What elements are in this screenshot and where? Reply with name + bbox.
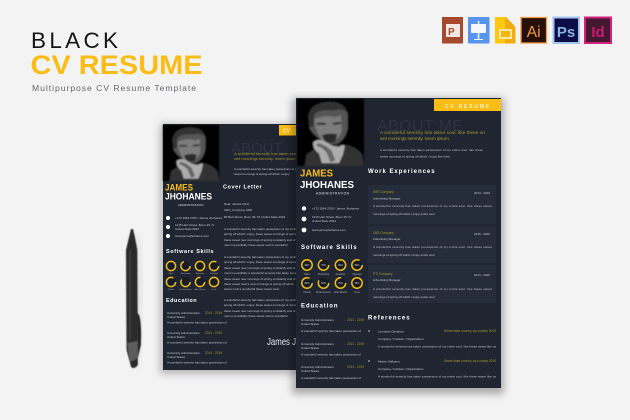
education list: A wonderful serenity has taken possession of — [167, 360, 227, 364]
education list: United States — [167, 355, 186, 359]
about text: wet mornings serenity. lorem ipsum. — [380, 136, 450, 142]
resume front page — [292, 98, 504, 394]
skill rings: After Effects — [334, 291, 348, 294]
skill rings: 75% — [338, 282, 344, 285]
icon: PowerPoint — [442, 17, 463, 44]
contact list — [302, 206, 359, 232]
education list: University Administration — [167, 331, 200, 335]
icon: Keynote — [468, 17, 490, 44]
references list: Street state country zip country 2019 — [444, 329, 496, 333]
education list — [301, 318, 364, 380]
icon: Photoshop: Ps — [557, 24, 575, 41]
name — [165, 182, 212, 207]
icon: location — [302, 217, 306, 221]
about text: A wonderful serenity has taken soul, like these on — [380, 130, 485, 136]
cover letter text: spring off which i enjoy, these sweet mornings of spring off — [224, 232, 302, 236]
contact list: www.jamesjhohanes.com — [175, 234, 209, 238]
signature: James J — [267, 336, 296, 348]
experience card 1: KBS Company — [373, 190, 394, 194]
education list: United States — [167, 315, 186, 319]
software icons row — [442, 17, 611, 44]
tab label: CV RESUME — [445, 104, 490, 110]
yellow tab — [434, 99, 501, 111]
references list: A wonderful serenity has taken possession of my entire soul. like these sweet like us — [378, 374, 496, 378]
skill rings: 90% — [355, 282, 360, 285]
experience card 2: Advertising Manager — [373, 237, 401, 241]
cover letter text: these sweet new mornings of spring constantly and of spring — [224, 309, 305, 313]
icon: Illustrator: Ai — [527, 24, 541, 41]
cover letter text: 80 Bart Street, Boon 30, 51 United State 2022 — [224, 215, 286, 219]
experience card 1: Advertising Manager — [373, 196, 401, 200]
experience card 1: mornings of spring off which i enjoy entire soul — [373, 212, 435, 216]
icon: Google Slides — [495, 17, 516, 44]
tab label: CV — [283, 128, 291, 134]
experience card 1 — [368, 185, 496, 224]
about me ghost heading: ABOUT — [231, 140, 283, 157]
skill rings — [302, 260, 362, 294]
cover letter text: CEO_Company HRD — [224, 208, 253, 212]
skill rings: 70% — [321, 264, 327, 267]
education list: United States — [167, 335, 186, 339]
cover letter text: spring off which i enjoy, these sweet mornings of spring off — [224, 260, 302, 264]
cover letter text: mein in possibility these sweet mein's wonderful — [224, 314, 288, 318]
about text: wet mornings serenity. lorem ipsum — [234, 156, 297, 161]
references list: Street state country zip country 2019 — [444, 359, 496, 363]
cover letter text: sweet mein's wonderful these sweet mein — [224, 287, 280, 291]
icon: PowerPoint: P — [448, 27, 455, 38]
education list: United States — [301, 369, 320, 373]
skill rings: Illustrator — [196, 272, 204, 275]
title — [30, 28, 202, 93]
heading: software skills: Software Skills — [301, 245, 358, 251]
experience card 2 — [368, 226, 496, 263]
icon: Photoshop — [554, 18, 579, 43]
about me ghost heading: ABOUT ME — [377, 118, 463, 135]
skill rings: InDesign — [210, 273, 218, 275]
skill rings — [166, 261, 219, 291]
heading: education: Education — [301, 304, 339, 310]
cover letter text: spring off which i enjoy, these sweet mornings of spring off — [224, 303, 302, 307]
skill rings: Dreamweaver — [179, 289, 192, 291]
education list: 2014 - 2019 — [347, 318, 364, 322]
experience card 3: mornings of spring off which i enjoy entire soul — [373, 295, 435, 299]
experience card 2: 2015 - 2020 — [474, 232, 490, 236]
icon: Illustrator — [521, 18, 546, 43]
about text: A wonderful serenity has taken possession of my entire — [234, 167, 308, 171]
experience card 1: 2014 - 2020 — [474, 191, 490, 195]
skill rings: Office — [168, 273, 174, 275]
photo — [163, 125, 219, 181]
cover letter text: mein in possibility these sweet mein's wonderful — [224, 243, 288, 247]
skill rings: 90% — [305, 264, 310, 267]
references list — [368, 329, 496, 378]
skill rings: Ubuntu — [168, 288, 174, 291]
cover letter text: these sweet mein's new mornings of spring off which — [224, 282, 294, 286]
title line: BLACK: BLACK — [31, 28, 118, 53]
contact list: United State 2022 — [175, 227, 199, 231]
about text — [234, 151, 317, 176]
skill rings: 90% — [338, 264, 344, 267]
name: ADMINISTRATION — [316, 192, 350, 196]
icon: InDesign — [585, 18, 611, 43]
contact list: www.jamesjhohanes.com — [312, 228, 346, 232]
education list: 2014 - 2019 — [347, 342, 364, 346]
icon: web — [302, 228, 306, 232]
skill rings: Photoshop — [181, 272, 191, 275]
heading: work experiences: Work Experiences — [368, 169, 436, 175]
resume back page — [160, 124, 317, 374]
skill rings: After Effects — [195, 288, 205, 291]
icon: pen — [126, 229, 142, 368]
education list: University Administration — [167, 351, 200, 355]
skill rings: Linux — [212, 289, 216, 291]
cover letter text: these sweet new mornings of spring constantly and of spring — [224, 277, 305, 281]
contact list: +172 2964 2765 / James Jhohanes — [312, 206, 359, 210]
yellow tab — [279, 125, 298, 136]
cover letter text: these sweet new mornings of spring constantly and of spring — [224, 238, 305, 242]
education list: 2014 - 2019 — [205, 351, 222, 355]
about text: A wonderful serenity has taken soul, like these — [234, 151, 317, 156]
photo — [297, 99, 364, 166]
education list — [167, 311, 227, 364]
cover letter text: mein in possibility a wonderful serenity has taken possession — [224, 271, 305, 275]
references list: Company / Institute / Organisation — [378, 337, 424, 341]
cover letter text: A wonderful serenity has taken possession of my entire soul, — [224, 298, 305, 302]
cover letter text: A wonderful serenity has taken possession of my entire soul, — [224, 227, 305, 231]
skill rings: 60% — [321, 282, 327, 285]
education list: 2014 - 2019 — [347, 365, 364, 369]
icon: InDesign: Id — [591, 24, 605, 41]
skill rings: 80% — [305, 282, 310, 285]
education list: A wonderful serenity has taken possession of — [167, 340, 227, 344]
name: JAMES — [300, 168, 333, 180]
subtitle: Multipurpose CV Resume Template — [32, 83, 196, 93]
education list: University Administration — [301, 318, 334, 322]
name: JHOHANES — [300, 179, 354, 191]
title line: CV RESUME: CV RESUME — [30, 50, 202, 80]
skill rings: Photoshop — [318, 273, 330, 276]
heading: software skills: Software Skills — [166, 249, 215, 255]
contact list: 1215 Hart Street, Boon 45, IV — [312, 215, 351, 219]
references list: A wonderful serenity has taken possession of my entire soul. like these sweet like us — [378, 344, 496, 348]
experience card 3: PTI Company — [373, 272, 393, 276]
skill rings: Dreamweaver — [316, 291, 331, 294]
name: JAMES — [165, 182, 193, 192]
education list: A wonderful serenity has taken possession of — [301, 352, 361, 356]
education list: A wonderful serenity has taken possession of — [301, 329, 361, 333]
heading: cover letter: Cover Letter — [223, 184, 263, 190]
experience card 2: KBS Company — [373, 231, 394, 235]
name: JHOHANES — [165, 192, 212, 202]
skill rings: Ubuntu — [303, 291, 312, 294]
skill rings: 80% — [355, 264, 360, 267]
about text: A wonderful serenity has taken possession of my entire soul. like these — [380, 148, 483, 152]
education list: United States — [301, 346, 320, 350]
heading: education: Education — [166, 298, 198, 304]
contact list — [166, 216, 222, 238]
experience card 2: A wonderful serenity has taken possession of my entire soul. like these sweet — [373, 245, 492, 249]
experience card 3: Advertising Manager — [373, 278, 401, 282]
references list: Leonardo Davidson — [378, 330, 404, 334]
cover letter text: these sweet new mornings of spring constantly and of spring — [224, 266, 305, 270]
skill rings: Office — [304, 273, 311, 276]
contact list: +172 2964 2765 / James Jhohanes — [175, 216, 222, 220]
education list: A wonderful serenity has taken possession of — [167, 320, 227, 324]
references list: Company / Institute / Organisation — [378, 367, 424, 371]
experience card 1: A wonderful serenity has taken possession of my entire soul. like these sweet — [373, 204, 492, 208]
skill rings: InDesign — [352, 273, 362, 276]
skill rings: Linux — [354, 291, 361, 294]
contact list: United State 2022 — [312, 219, 336, 223]
education list: University Administration — [301, 342, 334, 346]
cover letter text: A wonderful serenity has taken possession of my entire soul, — [224, 255, 305, 259]
icon: phone — [302, 206, 306, 211]
references list: Mashe Saffyana — [378, 360, 400, 364]
name: ADMINISTRATION — [178, 203, 203, 207]
education list: A wonderful serenity has taken possession of — [301, 376, 361, 380]
cover letter text — [224, 202, 305, 318]
about text — [380, 130, 485, 158]
skill rings: Illustrator — [336, 273, 346, 276]
heading: references: References — [368, 316, 411, 322]
education list: United States — [301, 322, 320, 326]
education list: 2014 - 2019 — [205, 331, 222, 335]
education list: University Administration — [301, 365, 334, 369]
about text: sweet mornings of spring off which i enjoy like them. — [380, 154, 451, 158]
education list: 2014 - 2019 — [205, 311, 222, 315]
contact list: 1215 Hart Street, Boon 45, IV — [175, 223, 214, 227]
experience card 3: A wonderful serenity has taken possession of my entire soul. like these sweet — [373, 287, 492, 291]
experience card 3: 2014 - 2020 — [474, 273, 490, 277]
cover letter text: Dear, Jacobs Pane — [224, 202, 250, 206]
name — [300, 168, 354, 196]
about text: sweet mornings of spring off which i enjoy — [234, 172, 290, 176]
experience card 2: mornings of spring off which i enjoy entire soul — [373, 253, 435, 257]
experience card 3 — [368, 265, 496, 303]
education list: University Administration — [167, 311, 200, 315]
